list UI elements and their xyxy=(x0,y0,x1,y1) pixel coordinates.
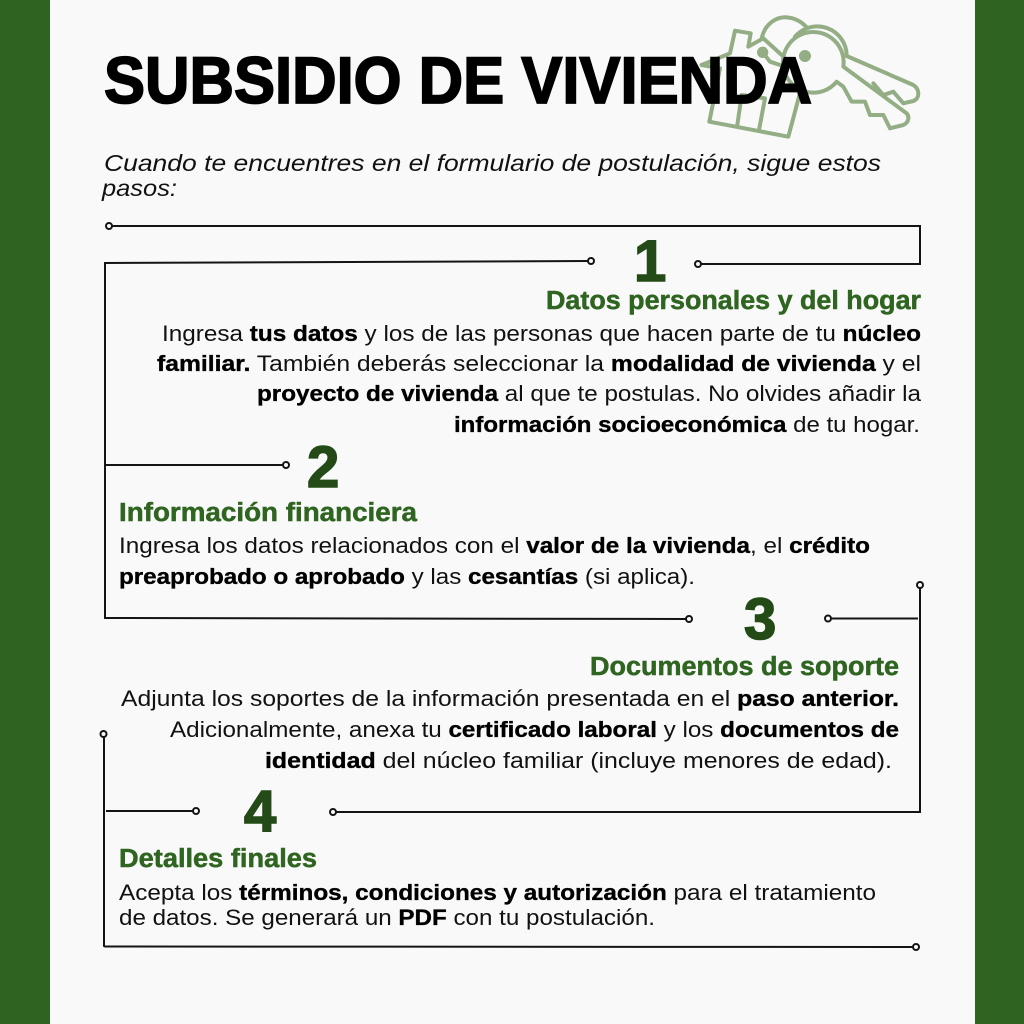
text: step 2 body: Ingresa los datos relacionados con el valor de la vivienda , el crédito xyxy=(119,533,870,558)
number 1: 1 xyxy=(634,229,666,294)
text: step 2 body: preaprobado o aprobado y las cesantías (si aplica). xyxy=(119,564,695,589)
intro text xyxy=(101,150,881,201)
heading: datos personales: Datos personales y del hogar xyxy=(546,287,921,315)
heading: documentos de soporte: Documentos de soporte xyxy=(590,653,899,681)
text: step 3 body xyxy=(121,686,899,773)
step 2 xyxy=(119,435,870,589)
number 2: 2 xyxy=(307,435,339,500)
text: step 1 body xyxy=(157,321,922,437)
text: step 3 body: Adjunta los soportes de la información presentada en el paso anterior. xyxy=(121,686,899,711)
step 1 xyxy=(157,229,922,437)
text: step 1 body: proyecto de vivienda al que te postulas. No olvides añadir la xyxy=(257,381,922,406)
heading: informacion financiera: Información financiera xyxy=(119,499,418,527)
text: step 4 body xyxy=(119,880,876,930)
title: SUBSIDIO DE VIVIENDA xyxy=(104,43,812,117)
step 4 xyxy=(119,779,876,930)
text: step 1 body: familiar. También deberás seleccionar la modalidad de vivienda y el xyxy=(157,351,921,376)
text: step 2 body xyxy=(119,533,870,589)
connector lines xyxy=(100,223,923,950)
step 3 xyxy=(121,587,899,773)
right green band xyxy=(975,0,1024,1024)
number 3: 3 xyxy=(744,587,776,652)
number 4: 4 xyxy=(244,779,276,844)
text: step 4 body: Acepta los términos, condiciones y autorización para el tratamiento xyxy=(119,880,876,905)
intro text: Cuando te encuentres en el formulario de postulación, sigue estos xyxy=(104,150,881,176)
text: step 1 body: Ingresa tus datos y los de las personas que hacen parte de tu núcleo xyxy=(162,321,921,346)
left green band xyxy=(0,0,50,1024)
text: step 4 body: de datos. Se generará un PDF con tu postulación. xyxy=(119,905,655,930)
text: step 3 body: identidad del núcleo familiar (incluye menores de edad). xyxy=(265,748,892,773)
intro text: pasos: xyxy=(101,175,177,201)
text: step 1 body: información socioeconómica de tu hogar. xyxy=(454,412,920,437)
text: step 3 body: Adicionalmente, anexa tu certificado laboral y los documentos de xyxy=(170,717,899,742)
heading: detalles finales: Detalles finales xyxy=(119,845,317,873)
icon: house keychain with keys xyxy=(702,17,918,137)
